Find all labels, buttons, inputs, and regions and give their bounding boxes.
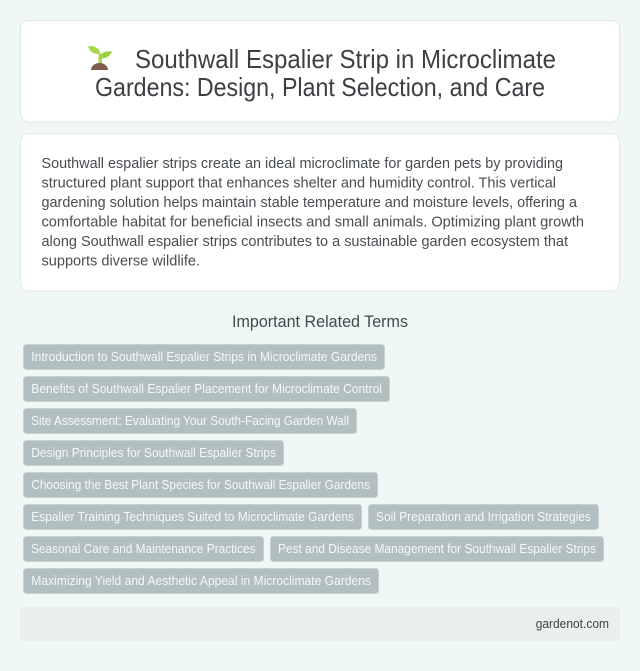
heading: important related terms: Important Related Terms [232,313,408,331]
tag: choosing plant species [24,472,378,498]
tag: site assessment: Site Assessment: Evaluating Your South-Facing Garden Wall [31,413,349,428]
title [95,44,556,102]
tag: seasonal care: Seasonal Care and Maintenance Practices [31,541,256,556]
tag: benefits: Benefits of Southwall Espalier Placement for Microclimate Control [31,381,382,396]
panel: related term tags [24,344,604,594]
tag: soil preparation [368,504,598,530]
text block: summary paragraph: Southwall espalier strips create an ideal microclimate for garden pets by providing [42,155,563,172]
tag: pest and disease [270,536,604,562]
tag: pest and disease: Pest and Disease Management for Southwall Espalier Strips [278,541,596,556]
tag: choosing plant species: Choosing the Best Plant Species for Southwall Espalier Gardens [31,477,370,492]
tag: benefits [24,376,390,402]
tag: maximizing yield: Maximizing Yield and Aesthetic Appeal in Microclimate Gardens [31,573,371,588]
tag: introduction [24,344,384,370]
icon: seedling [88,46,112,70]
text block: summary paragraph: comfortable habitat for beneficial insects and small animals. Optimizing plant growth [42,214,584,230]
tag: training techniques: Espalier Training Techniques Suited to Microclimate Gardens [31,509,354,524]
tag: design principles: Design Principles for Southwall Espalier Strips [31,445,276,460]
title: Southwall Espalier Strip in Microclimate [135,44,556,74]
text block: summary paragraph: supports diverse wildlife. [42,252,200,270]
footer: gardenot.com [536,616,609,631]
tag: seasonal care [24,536,264,562]
tag: soil preparation: Soil Preparation and Irrigation Strategies [376,509,591,524]
text block: summary paragraph: structured plant support that enhances shelter and humidity control. This vertical [42,174,556,192]
text block: summary paragraph [42,155,584,270]
panel: title card [20,20,620,122]
tag: maximizing yield [24,568,378,594]
title: Gardens: Design, Plant Selection, and Care [95,72,545,102]
tag: site assessment [24,408,356,434]
tag: training techniques [24,504,362,530]
tag: introduction: Introduction to Southwall Espalier Strips in Microclimate Gardens [31,349,377,364]
text block: summary paragraph: along Southwall espalier strips contributes to a sustainable garden ecosystem that [42,233,569,250]
footer [20,607,620,641]
panel: summary card [20,134,620,291]
tag: design principles [24,440,284,466]
text block: summary paragraph: gardening solution helps maintain stable temperature and moisture levels, offering a [42,194,578,211]
